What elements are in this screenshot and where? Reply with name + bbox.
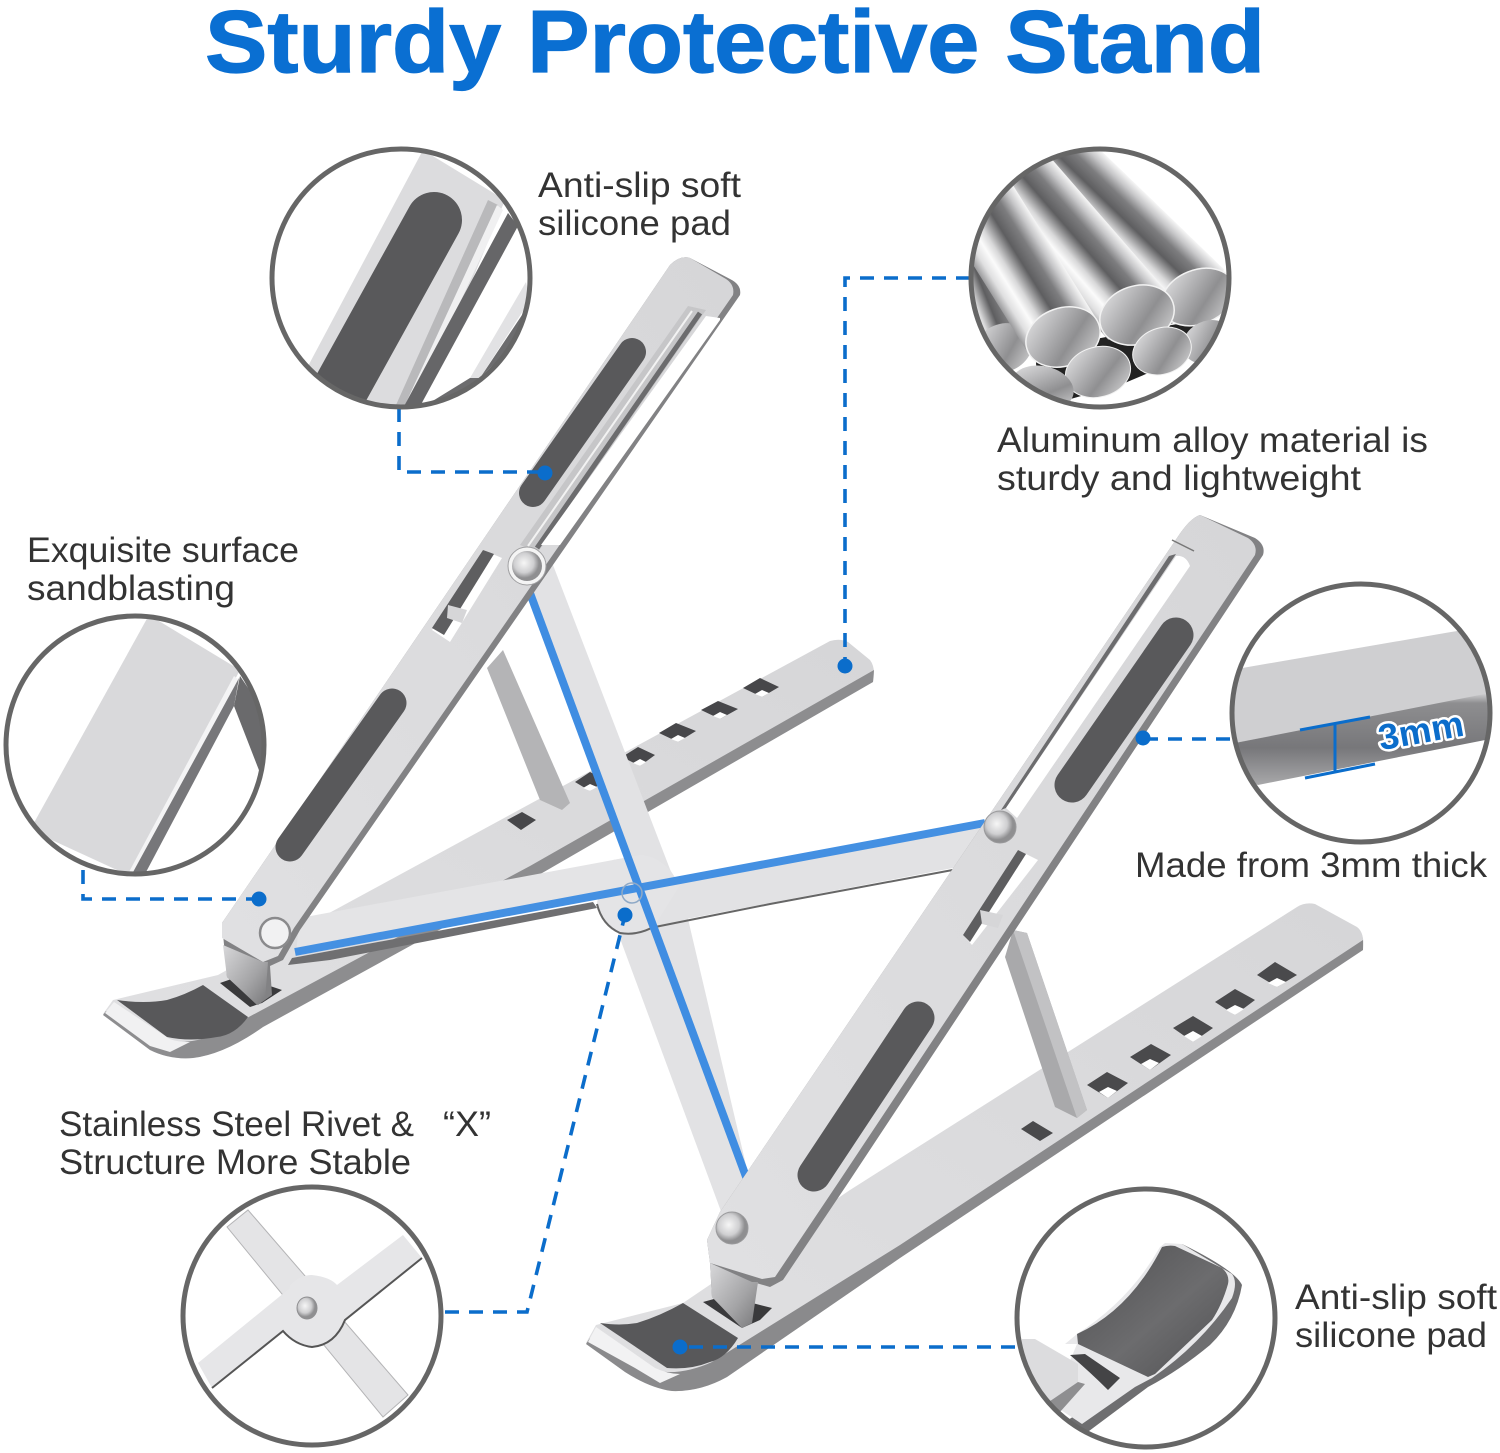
rails and slot: [520, 306, 706, 552]
circle: silicone pad detail: [272, 149, 536, 420]
rim: [1068, 1244, 1242, 1434]
circle: foot pad: [1015, 1189, 1275, 1447]
rivet upper: [508, 547, 546, 585]
lower pad: [814, 1018, 918, 1175]
pad: [1077, 1246, 1228, 1377]
left base holes: [507, 678, 779, 830]
right upper arm: [707, 515, 1264, 1328]
circle: sandblasted surface: [6, 615, 265, 876]
label: silicone pad bottom: [1295, 1278, 1497, 1355]
slot: [1001, 554, 1176, 810]
label: silicone pad top: silicone pad: [538, 204, 731, 243]
bracket: [710, 1263, 758, 1328]
blue edge A: [527, 585, 748, 1182]
right foot pad: [600, 1303, 738, 1368]
label: 3mm thick: Made from 3mm thick: [1135, 846, 1488, 885]
label: rivet and X: Structure More Stable: [59, 1143, 411, 1182]
circle: aluminum rods: [968, 146, 1232, 410]
label: sandblasting: sandblasting: [27, 569, 235, 608]
left upper arm: [222, 257, 740, 1005]
base: [1052, 1243, 1235, 1424]
label: silicone pad top: [538, 166, 741, 243]
window: [963, 850, 1038, 945]
bracket: [223, 945, 268, 1005]
lower pad: [290, 703, 392, 847]
left stand base: [103, 640, 874, 1058]
rivet lower: [260, 918, 290, 948]
circle: X rivet: [183, 1187, 441, 1445]
center joint: [597, 855, 680, 933]
strut A: [526, 552, 750, 1214]
left foot pad: [117, 985, 248, 1040]
X structure struts: [288, 552, 985, 1214]
label: aluminum alloy: Aluminum alloy material is: [997, 421, 1428, 460]
rivet lower: [716, 1212, 748, 1244]
label: rivet and X: Stainless Steel Rivet &: [59, 1105, 414, 1144]
left support leg: [487, 650, 570, 810]
right base holes: [1021, 962, 1297, 1141]
label: aluminum alloy: sturdy and lightweight: [997, 459, 1361, 498]
label: sandblasting: Exquisite surface: [27, 531, 299, 570]
right stand base: [586, 903, 1363, 1391]
label: silicone pad top: Anti-slip soft: [538, 166, 741, 205]
rivet upper: [984, 811, 1016, 843]
upper pad: [533, 352, 632, 493]
label: silicone pad bottom: Anti-slip soft: [1295, 1278, 1497, 1317]
label: rivet and X: “X”: [443, 1105, 491, 1144]
strut B: [288, 823, 985, 965]
label: rivet and X: [59, 1105, 491, 1182]
label: sandblasting: [27, 531, 299, 608]
blue edge B: [295, 823, 985, 952]
right support leg: [1005, 930, 1087, 1118]
label: silicone pad bottom: silicone pad: [1295, 1316, 1487, 1355]
upper pad: [1072, 635, 1176, 785]
hinge: [1022, 1339, 1078, 1400]
label: aluminum alloy: [997, 421, 1428, 498]
3mm label: 3mm: [1375, 703, 1467, 758]
callout lines: [83, 278, 1230, 1354]
window: [432, 550, 502, 642]
thickness bracket: [1300, 717, 1375, 778]
circle: 3mm thickness: [1225, 584, 1495, 842]
